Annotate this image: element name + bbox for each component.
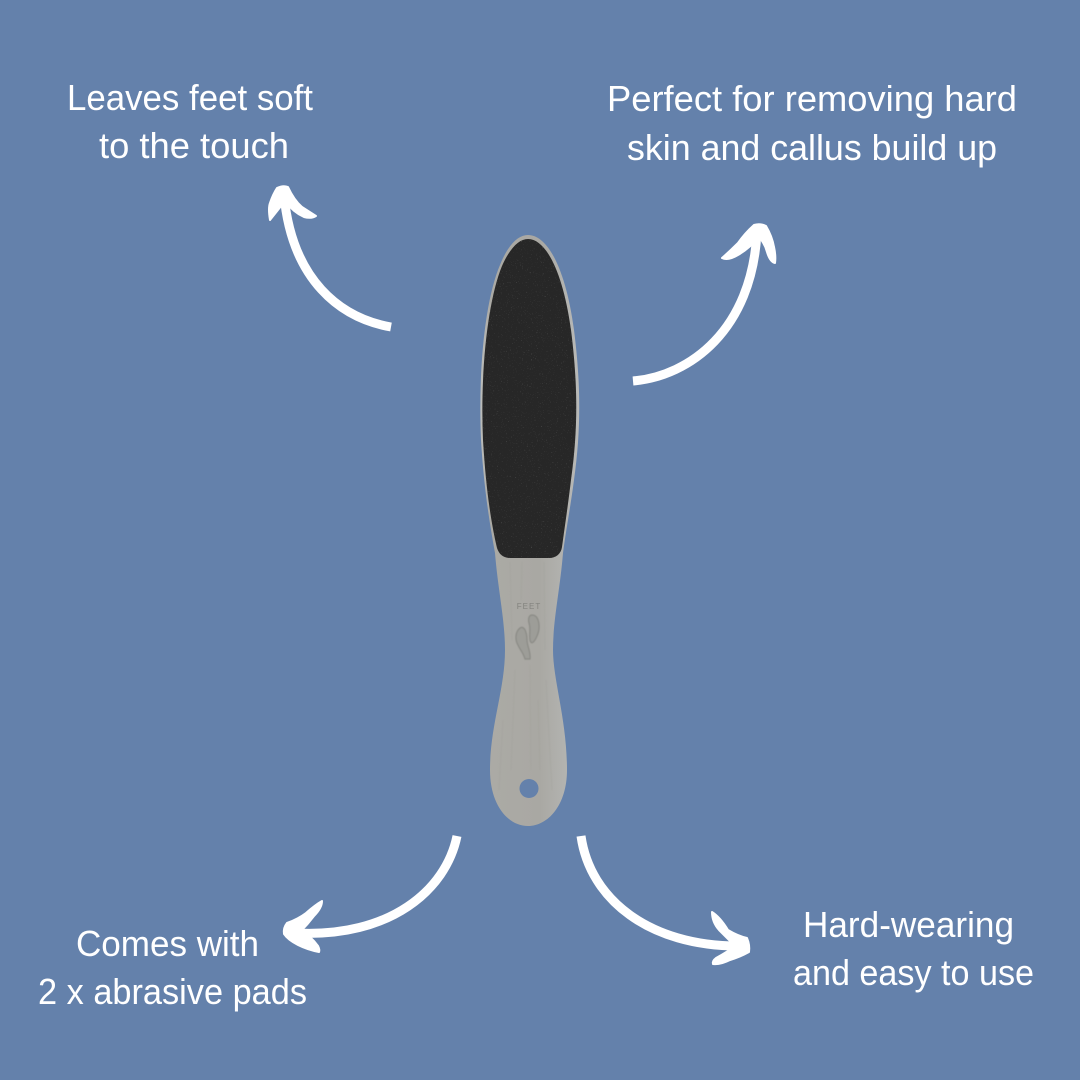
text: perfect for removing hard skin: Perfect for removing hard xyxy=(607,78,1017,119)
text: hard-wearing and easy to use: Hard-wearing xyxy=(803,904,1014,945)
text: hard-wearing and easy to use xyxy=(793,904,1034,993)
text: leaves feet soft: to the touch xyxy=(99,125,289,166)
text: leaves feet soft xyxy=(67,77,313,166)
text: perfect for removing hard skin xyxy=(607,78,1017,168)
arrow: bottom left xyxy=(284,836,457,952)
arrow: top left xyxy=(269,186,391,327)
abrasive pad xyxy=(482,239,576,558)
text: leaves feet soft: Leaves feet soft xyxy=(67,77,313,118)
text: comes with abrasive pads: Comes with xyxy=(76,923,259,964)
foot file product xyxy=(480,235,579,826)
arrow: bottom right xyxy=(581,836,749,964)
arrow: top right xyxy=(633,224,775,381)
file body xyxy=(480,235,579,826)
text: perfect for removing hard skin: skin and callus build up xyxy=(627,127,997,168)
engraved label: FEET: FEET xyxy=(517,602,541,611)
brushed metal grain xyxy=(499,562,552,790)
icon: engraved footprints xyxy=(516,615,539,659)
text: comes with abrasive pads xyxy=(38,923,307,1012)
text: hard-wearing and easy to use: and easy to use xyxy=(793,952,1034,993)
text: comes with abrasive pads: 2 x abrasive pads xyxy=(38,971,307,1012)
